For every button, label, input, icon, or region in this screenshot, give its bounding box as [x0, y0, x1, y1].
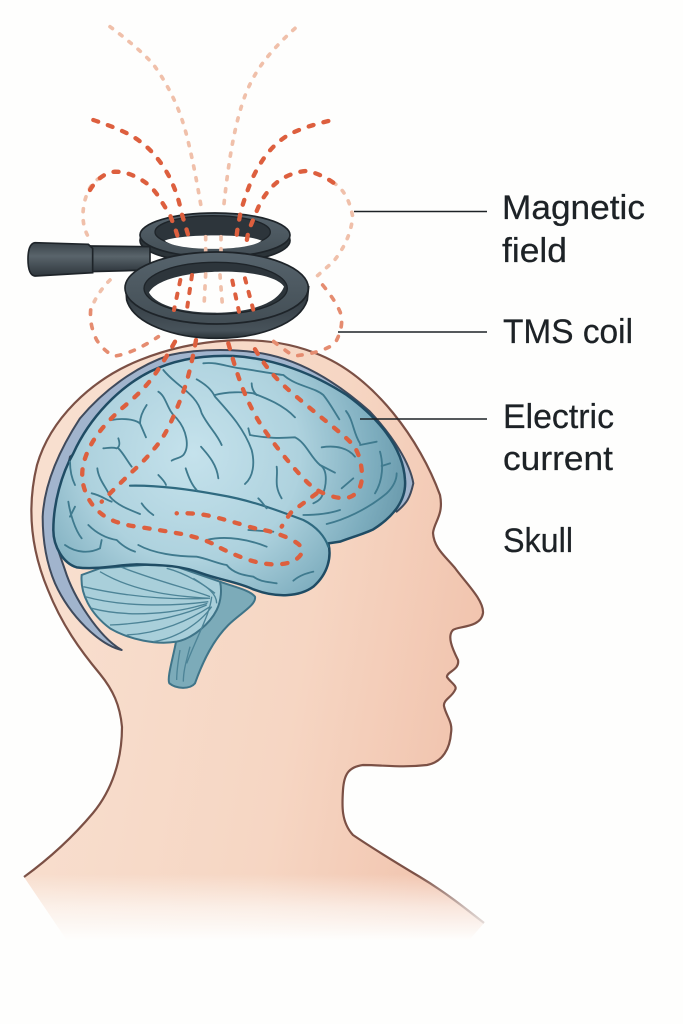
- skull crescent: [43, 350, 413, 650]
- leader line: TMS coil: [338, 331, 487, 333]
- lower coil ring: [125, 252, 309, 338]
- label: Electric current: current: [503, 440, 614, 478]
- head silhouette: [24, 340, 484, 945]
- label: Magnetic field: field: [502, 232, 567, 270]
- leader line: electric current: [360, 418, 487, 420]
- label: Electric current: [503, 398, 614, 478]
- skull and brain: [43, 340, 413, 688]
- label: Skull: Skull: [503, 522, 573, 560]
- cerebellum and brain stem: [81, 563, 255, 688]
- coil handle: [28, 243, 150, 276]
- field dashes inside lower ring: [174, 274, 253, 312]
- cerebrum: [53, 356, 405, 595]
- field loops below coil: [90, 285, 342, 356]
- label: TMS coil: TMS coil: [503, 313, 633, 351]
- leader line: magnetic field: [354, 210, 487, 212]
- magnetic field lines above coil: [28, 27, 353, 356]
- label: Magnetic field: [502, 189, 645, 270]
- neck fade: [0, 874, 520, 948]
- electric current paths: [82, 340, 362, 564]
- brain sulci: [65, 363, 397, 583]
- label: Electric current: Electric: [503, 398, 614, 436]
- label: Magnetic field: Magnetic: [502, 189, 645, 227]
- upper coil ring: [140, 213, 290, 263]
